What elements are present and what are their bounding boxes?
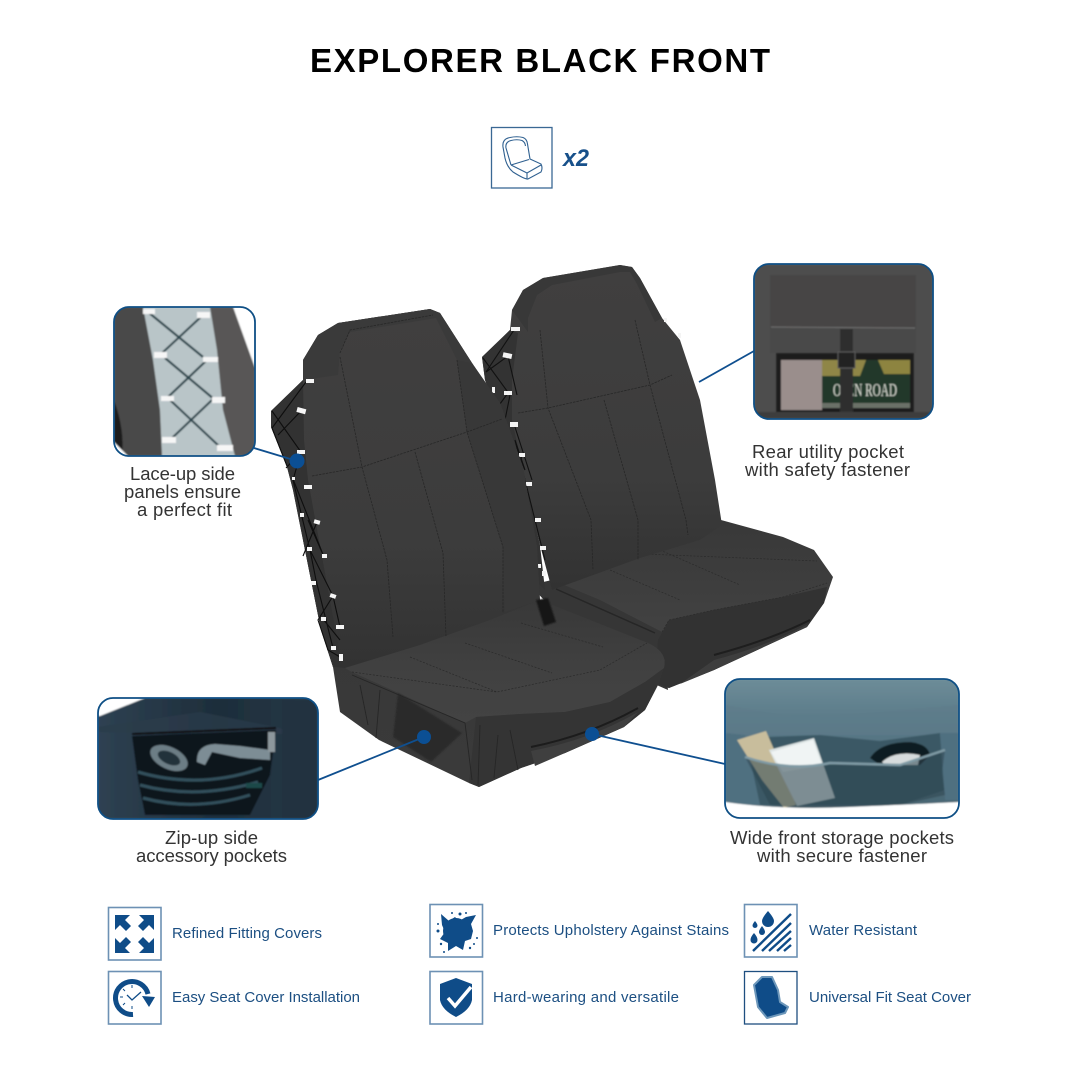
feature: universal fit <box>744 972 971 1024</box>
rear seat cover <box>482 265 833 690</box>
label: lace-up side panels: a perfect fit <box>137 499 232 520</box>
label: zip-up accessory pockets: accessory pockets <box>136 845 287 866</box>
icon: seat silhouette <box>754 977 788 1018</box>
label: front storage pockets: with secure fastener <box>756 845 927 866</box>
icon: clock with arrow <box>115 982 155 1015</box>
rear seat cushion <box>552 520 833 688</box>
feature: refined fitting covers: Refined Fitting Covers <box>172 925 322 942</box>
icon: seat quantity x2: x2 <box>561 145 590 172</box>
front skirt detail <box>469 668 664 787</box>
front seat outline and skirt <box>271 309 665 787</box>
feature: refined fitting covers <box>108 908 322 960</box>
label: front storage pockets <box>730 827 954 866</box>
panel: lace-up photo <box>114 307 255 456</box>
label: zip-up accessory pockets: Zip-up side <box>165 827 258 848</box>
front cushion top <box>345 600 665 723</box>
front seat back stitching <box>312 315 503 637</box>
icon: expanding arrows <box>115 915 154 953</box>
rear stitching <box>518 320 688 570</box>
rear cushion back band filling the join between the seats <box>530 580 668 690</box>
front seat back <box>303 309 540 668</box>
rear seat back <box>482 265 722 590</box>
rear white tabs <box>492 318 681 594</box>
feature: hard-wearing: Hard-wearing and versatile <box>493 989 679 1006</box>
panel: rear pocket photo <box>754 264 933 419</box>
feature: easy installation <box>108 972 360 1024</box>
front seat cover <box>271 309 665 787</box>
feature: water resistant <box>744 904 918 957</box>
label: lace-up side panels: Lace-up side <box>130 463 235 484</box>
feature: easy installation: Easy Seat Cover Installation <box>172 989 360 1006</box>
feature: stain protection: Protects Upholstery Against Stains <box>493 922 729 939</box>
icon: drops and rain lines <box>750 911 791 951</box>
icon: ink splat <box>436 912 478 953</box>
label: rear utility pocket: with safety fastener <box>744 459 910 480</box>
panel: zip-up pocket photo <box>98 698 318 819</box>
connector lines and markers <box>254 351 754 780</box>
front white tabs <box>292 379 344 661</box>
label: lace-up side panels <box>124 463 241 520</box>
feature: water resistant: Water Resistant <box>809 922 918 939</box>
label: front storage pockets: Wide front storage pockets <box>730 827 954 848</box>
label: lace-up side panels: panels ensure <box>124 481 241 502</box>
feature: universal fit: Universal Fit Seat Cover <box>809 989 971 1006</box>
panel: rear pocket photo: OPEN ROAD <box>833 380 897 400</box>
rear cushion skirt <box>655 587 827 688</box>
front cushion stitching <box>352 623 647 692</box>
front side lace panel <box>271 380 340 667</box>
fold shadow at back crease <box>536 598 556 626</box>
icon: seat quantity x2 <box>492 128 590 188</box>
feature: hard-wearing <box>430 972 679 1024</box>
title: EXPLORER BLACK FRONT <box>310 42 770 79</box>
label: zip-up accessory pockets <box>136 827 287 866</box>
panel: front storage pocket photo <box>725 679 959 818</box>
feature: stain protection <box>430 904 729 957</box>
label: rear utility pocket: Rear utility pocket <box>752 441 904 462</box>
label: rear utility pocket <box>744 441 910 480</box>
rear lacing <box>483 330 545 560</box>
icon: shield with check <box>440 978 472 1017</box>
front lacing <box>272 382 340 657</box>
